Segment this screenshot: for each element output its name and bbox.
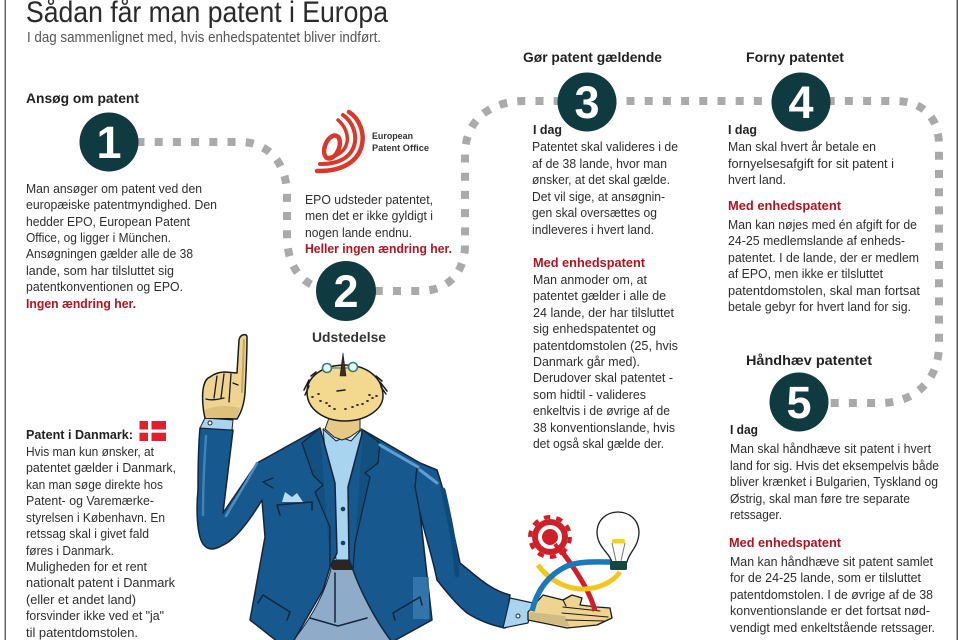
number badge 4: 4 [788, 77, 814, 128]
number badge 3: 3 [574, 77, 600, 128]
icon: gear and light bulb idea [530, 512, 639, 611]
dotted path connecting the steps [136, 101, 939, 403]
with unitary patent text: vendigt med enkeltstående retssager. [730, 621, 935, 635]
number badge 5: 5 [786, 377, 812, 428]
text block: patentkonventionen og EPO. [26, 280, 183, 294]
with unitary patent text: Man kan nøjes med én afgift for de [728, 218, 917, 232]
with unitary patent text: enkeltvis i de øvrige af de [533, 404, 670, 418]
today text: Det vil sige, at ansøgnin- [532, 190, 665, 204]
text block: europæiske patentmyndighed. Den [26, 198, 217, 212]
with unitary patent text [729, 536, 935, 635]
step 3: validate patent [523, 49, 678, 451]
text block: nogen lande endnu. [305, 226, 412, 240]
heading: Forny patentet [746, 49, 844, 65]
text block: føres i Danmark. [26, 544, 114, 558]
number badge 2 [316, 261, 376, 321]
today text: retssager. [730, 508, 782, 522]
with unitary patent text: af EPO, men ikke er tilsluttet [728, 267, 884, 281]
today text: Patentet skal valideres i de [532, 140, 678, 154]
panel: patent in Denmark [26, 421, 176, 640]
today text: I dag [533, 123, 562, 137]
heading: Håndhæv patentet [746, 352, 872, 368]
heading: Udstedelse [312, 329, 386, 345]
text block: (eller et andet land) [26, 593, 136, 607]
with unitary patent text: 38 konventionslande, hvis [533, 421, 675, 435]
text block: kan man søge direkte hos [26, 478, 163, 492]
text block: Ansøgningen gælder alle de 38 [26, 247, 193, 261]
text block: Heller ingen ændring her. [305, 242, 452, 256]
today text: ønsker, at det skal gælde. [532, 173, 670, 187]
today text: bliver krænket i Bulgarien, Tyskland og [730, 475, 938, 489]
step 5: enforce patent [729, 352, 939, 635]
text block: hedder EPO, European Patent [26, 215, 191, 229]
today text [532, 123, 678, 237]
today text: hvert land. [728, 173, 786, 187]
with unitary patent text: patentet. I de lande, der er medlem [728, 251, 919, 265]
text block: styrelsen i København. En [26, 511, 165, 525]
icon: Danish flag [140, 421, 166, 441]
with unitary patent text: Derudover skal patentet - [533, 371, 673, 385]
number badge 1 [80, 112, 138, 172]
today text: Man skal håndhæve sit patent i hvert [730, 442, 932, 456]
step 2: issuance [305, 112, 452, 345]
lower hand and cuff [503, 595, 612, 628]
text block: Office, og ligger i München. [26, 231, 171, 245]
step 4: renew patent [728, 49, 921, 314]
subtitle: I dag sammenlignet med, hvis enhedspatentet bliver indført. [27, 30, 381, 46]
illustration: man in blue jacket pointing upward [197, 335, 612, 640]
text block [305, 193, 452, 256]
with unitary patent text: Man kan håndhæve sit patent samlet [730, 555, 934, 569]
text block: til patentdomstolen. [26, 626, 138, 640]
with unitary patent text: sig enhedspatentet og [533, 322, 656, 336]
text block: patentet gælder i Danmark, [26, 461, 176, 475]
heading: Ansøg om patent [26, 90, 139, 106]
number badge 1: 1 [96, 117, 122, 168]
with unitary patent text: det også skal gælde der. [533, 437, 664, 451]
today text: land for sig. Hvis det eksempelvis både [730, 459, 939, 473]
with unitary patent text: Danmark går med). [533, 355, 640, 369]
with unitary patent text [728, 199, 921, 314]
with unitary patent text: patentdomstolen, skal man fortsat [728, 284, 921, 298]
with unitary patent text: som hidtil - valideres [533, 388, 646, 402]
step 1: apply for patent [26, 90, 217, 311]
text block [26, 445, 176, 640]
text block [26, 182, 217, 311]
number badge 4 [772, 72, 830, 132]
text block: Muligheden for et rent [26, 560, 148, 574]
text block: forsvinder ikke ved et "ja" [26, 609, 164, 623]
trousers and shirt [292, 429, 392, 640]
text block: EPO udsteder patentet, [305, 193, 433, 207]
with unitary patent text: Med enhedspatent [728, 199, 842, 213]
today text: indleveres i hvert land. [532, 223, 654, 237]
with unitary patent text: patentdomstolen (25, hvis [533, 339, 678, 353]
today text: I dag [728, 123, 757, 137]
with unitary patent text: patentet gælder i alle de [533, 289, 666, 303]
with unitary patent text: 24-25 medlemslande af enheds- [728, 234, 905, 248]
jacket left side and raised arm [197, 428, 337, 640]
text block: Patent- og Varemærke- [26, 494, 154, 508]
with unitary patent text: Man anmoder om, at [533, 273, 648, 287]
today text: af de 38 lande, hvor man [532, 157, 667, 171]
today text: Østrig, skal man føre tre separate [730, 492, 910, 506]
heading: Gør patent gældende [523, 49, 662, 65]
today text: gen skal oversættes og [532, 206, 657, 220]
number badge 2: 2 [333, 266, 359, 317]
with unitary patent text: Med enhedspatent [729, 536, 842, 550]
text block: men det er ikke gyldigt i [305, 209, 433, 223]
icon: European Patent Office logo: Patent Office [372, 143, 429, 154]
icon: European Patent Office logo [317, 112, 429, 171]
text block: retssag skal i givet fald [26, 527, 149, 541]
text block: Ingen ændring her. [26, 297, 136, 311]
today text: fornyelsesafgift for sit patent i [728, 157, 894, 171]
with unitary patent text [533, 256, 678, 451]
number badge 5 [770, 372, 828, 432]
today text [728, 123, 894, 187]
jacket right side and lowered arm [348, 430, 510, 640]
with unitary patent text: konventionslande er det fortsat nød- [730, 604, 930, 618]
heading: Patent i Danmark: [26, 428, 133, 442]
text block: Hvis man kun ønsker, at [26, 445, 155, 459]
today text: I dag [730, 423, 758, 437]
with unitary patent text: 24 lande, der har tilsluttet [533, 306, 675, 320]
neck and head [304, 353, 387, 440]
today text: Man skal hvert år betale en [728, 140, 876, 154]
with unitary patent text: Med enhedspatent [533, 256, 646, 270]
number badge 3 [558, 72, 616, 132]
text block: lande, som har tilsluttet sig [26, 264, 174, 278]
today text [730, 423, 939, 522]
raised hand with pointing finger [200, 335, 247, 430]
text block: Man ansøger om patent ved den [26, 182, 202, 196]
with unitary patent text: patentdomstolen. I de øvrige af de 38 [730, 588, 933, 602]
with unitary patent text: betale gebyr for hvert land for sig. [728, 300, 911, 314]
with unitary patent text: for de 24-25 lande, som er tilsluttet [730, 571, 922, 585]
icon: European Patent Office logo: European [372, 131, 413, 142]
text block: nationalt patent i Danmark [26, 576, 176, 590]
